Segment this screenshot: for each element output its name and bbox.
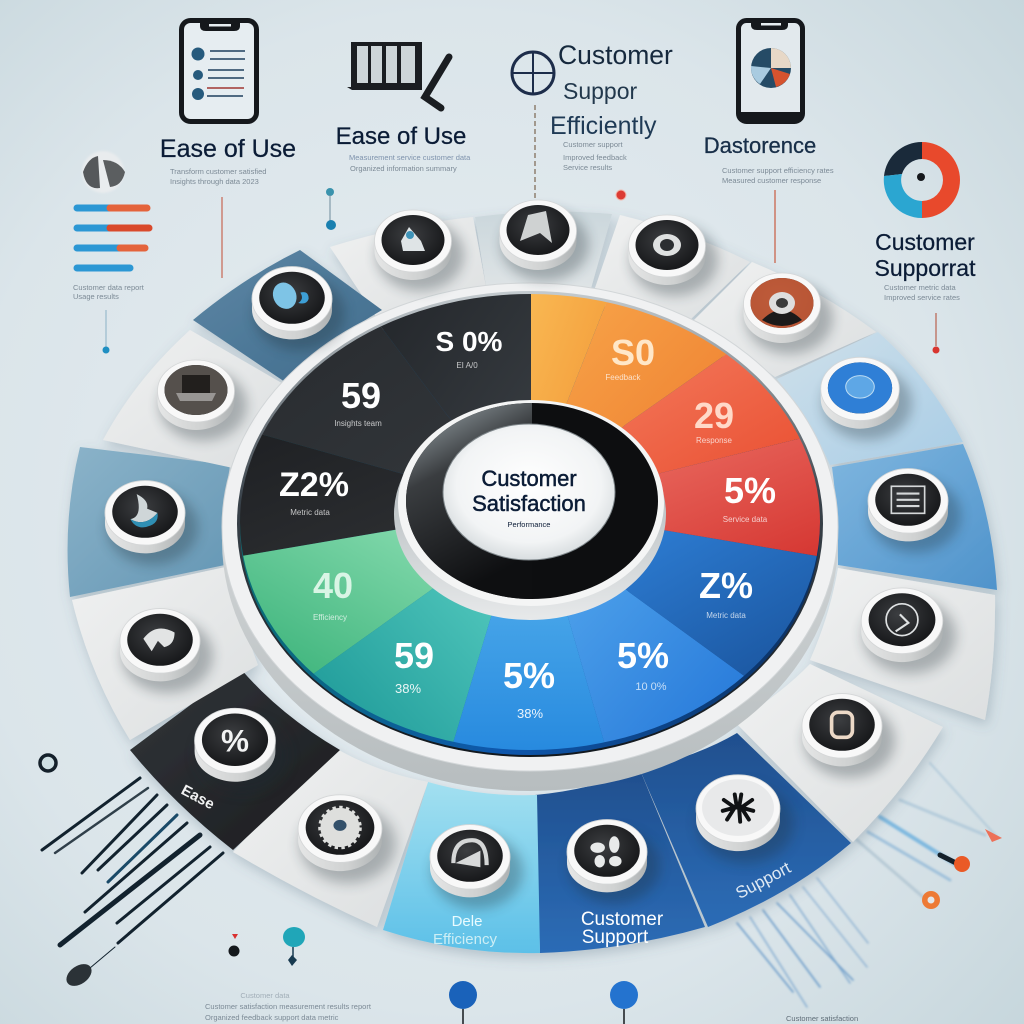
hub title: Performance xyxy=(508,520,550,529)
text: bottom caption left: Organized feedback support data metric xyxy=(205,1013,339,1022)
slice: orange xyxy=(566,302,726,428)
button: list xyxy=(868,469,961,553)
text: bottom caption left: Customer data xyxy=(240,991,290,1000)
pin: blue left bottom xyxy=(449,981,477,1024)
text: bar legend description: Customer data report xyxy=(73,283,145,292)
right stripe lines xyxy=(737,763,997,1007)
pie value labels: 5% xyxy=(617,635,669,676)
pie value labels: Z2% xyxy=(279,466,349,504)
slice: green xyxy=(243,530,433,674)
button: white flower xyxy=(696,775,794,863)
button: top right xyxy=(628,215,718,296)
pie value labels: Feedback xyxy=(605,373,642,382)
pin: orange dots xyxy=(922,829,1002,909)
tab labels: Support xyxy=(732,858,794,903)
button: top left xyxy=(374,210,464,291)
text: bar legend description: Usage results xyxy=(73,292,119,301)
text: bottom caption left xyxy=(205,991,372,1022)
icon: calendar with check xyxy=(347,42,449,108)
center hub xyxy=(394,400,666,620)
button: clover xyxy=(567,820,660,904)
button: percent: % xyxy=(221,722,249,758)
hub title: Satisfaction xyxy=(472,491,586,516)
button: orange xyxy=(744,273,833,354)
heading: customer support efficiency: Suppor xyxy=(563,78,638,104)
tab labels xyxy=(178,782,794,948)
text: customer support description: Improved service rates xyxy=(884,293,960,302)
tab labels: Ease xyxy=(178,782,217,813)
button: teal xyxy=(105,481,198,565)
slice: orange red xyxy=(622,354,800,474)
button: blue leaf xyxy=(252,267,345,351)
heading: customer support efficiency: Customer xyxy=(558,40,673,70)
pie value labels xyxy=(279,326,776,721)
text: ease of use 2 description xyxy=(349,153,471,173)
pie value labels: 5% xyxy=(503,655,555,696)
text: dastorence description: Measured customer response xyxy=(722,176,821,185)
dark marker stroke xyxy=(940,855,958,864)
pin: left blue xyxy=(102,310,110,354)
pie value labels: Efficiency xyxy=(313,613,347,622)
text: efficiency description: Improved feedback xyxy=(563,153,627,162)
slice: light orange xyxy=(531,294,606,404)
text: efficiency description: Customer support xyxy=(563,140,624,149)
slice: dark upper left xyxy=(262,326,452,474)
hub title xyxy=(472,466,586,529)
slice: mid blue xyxy=(568,590,744,742)
pie value labels: S 0% xyxy=(436,326,503,357)
button: at sign xyxy=(430,825,523,909)
pie value labels: Metric data xyxy=(290,508,330,517)
pie value labels: 29 xyxy=(694,395,734,436)
pie value labels: Response xyxy=(696,436,733,445)
heading: customer support efficiency: Efficiently xyxy=(550,112,657,140)
pin: ring xyxy=(40,755,56,771)
pie value labels: 59 xyxy=(341,375,381,416)
button: laptop xyxy=(158,360,247,441)
bar legend xyxy=(77,208,149,268)
pie value labels: 59 xyxy=(394,635,434,676)
pie value labels: 10 0% xyxy=(635,681,667,693)
connector: efficiency xyxy=(534,105,536,200)
button: leaf xyxy=(120,609,213,693)
slice: teal xyxy=(314,588,492,742)
text: ease of use 1 description: Insights through data 2023 xyxy=(170,177,259,186)
text: efficiency description xyxy=(563,140,627,172)
text: bottom caption left: Customer satisfaction measurement results report xyxy=(205,1002,372,1011)
button: blue xyxy=(821,357,912,440)
icon: gauge blob xyxy=(82,151,125,193)
main dial ring xyxy=(222,283,838,791)
slice: red xyxy=(658,438,820,556)
pie value labels: 40 xyxy=(313,565,353,606)
pie value labels: 5% xyxy=(724,470,776,511)
pin: teal bottom xyxy=(283,927,305,966)
icon: tablet checklist xyxy=(182,19,256,122)
pie value labels: Insights team xyxy=(334,419,382,428)
heading: customer support: Customer xyxy=(875,229,975,255)
heading: dastorence: Dastorence xyxy=(704,133,816,158)
text: customer support description xyxy=(884,283,960,302)
pin: blue right bottom xyxy=(610,981,638,1024)
heading: customer support xyxy=(874,229,976,281)
pie value labels: Service data xyxy=(723,515,768,524)
button: percent xyxy=(195,708,289,793)
pie value labels: Metric data xyxy=(706,611,746,620)
button: dial xyxy=(861,588,956,674)
tab labels: Dele xyxy=(452,913,482,930)
icon: phone with chart xyxy=(738,19,802,122)
tab labels: Support xyxy=(582,927,649,948)
left stripe lines xyxy=(42,778,223,990)
text: ease of use 1 description xyxy=(170,167,266,186)
icon: globe xyxy=(512,52,554,94)
heading: customer support efficiency xyxy=(550,40,673,140)
pin: red top xyxy=(616,190,626,200)
slice: dark top xyxy=(380,294,531,420)
icon buttons xyxy=(105,200,961,909)
text: bar legend description xyxy=(73,283,145,301)
text: ease of use 2 description: Measurement service customer data xyxy=(349,153,471,162)
pie value labels: 38% xyxy=(517,706,543,721)
tab labels: Customer xyxy=(581,909,664,930)
pie value labels: S0 xyxy=(611,332,655,373)
button: lower right xyxy=(802,694,895,778)
icon: donut chart xyxy=(884,142,960,218)
segment tabs xyxy=(68,212,997,953)
outer segment ring xyxy=(68,212,997,953)
pie value labels: 38% xyxy=(395,681,421,696)
button: gear xyxy=(298,795,396,883)
heading: ease of use 2: Ease of Use xyxy=(336,123,466,150)
hub title: Customer xyxy=(481,466,577,491)
heading: ease of use 1: Ease of Use xyxy=(160,135,296,163)
slice: deep blue xyxy=(626,530,817,676)
tab labels: Efficiency xyxy=(433,931,497,948)
connector: customer support xyxy=(932,313,940,354)
pin: black and red xyxy=(228,934,240,956)
pie value labels: EI A/0 xyxy=(456,361,478,370)
text: ease of use 2 description: Organized information summary xyxy=(350,164,457,173)
pin: teal top xyxy=(326,188,336,230)
pie chart xyxy=(240,294,820,750)
heading: customer support: Supporrat xyxy=(874,255,976,281)
text: dastorence description: Customer support efficiency rates xyxy=(722,166,834,175)
text: ease of use 1 description: Transform customer satisfied xyxy=(170,167,266,176)
pie value labels: Z% xyxy=(699,565,753,606)
connector: ease of use 1 xyxy=(221,197,223,278)
text: efficiency description: Service results xyxy=(563,163,612,172)
slice: dark left xyxy=(240,434,404,556)
text: bottom caption right: Customer satisfaction xyxy=(786,1014,858,1023)
button: top center xyxy=(500,200,589,281)
text: customer support description: Customer metric data xyxy=(884,283,957,292)
connector: dastorence xyxy=(774,190,776,263)
slice: light blue xyxy=(454,616,604,750)
text: dastorence description xyxy=(722,166,834,185)
